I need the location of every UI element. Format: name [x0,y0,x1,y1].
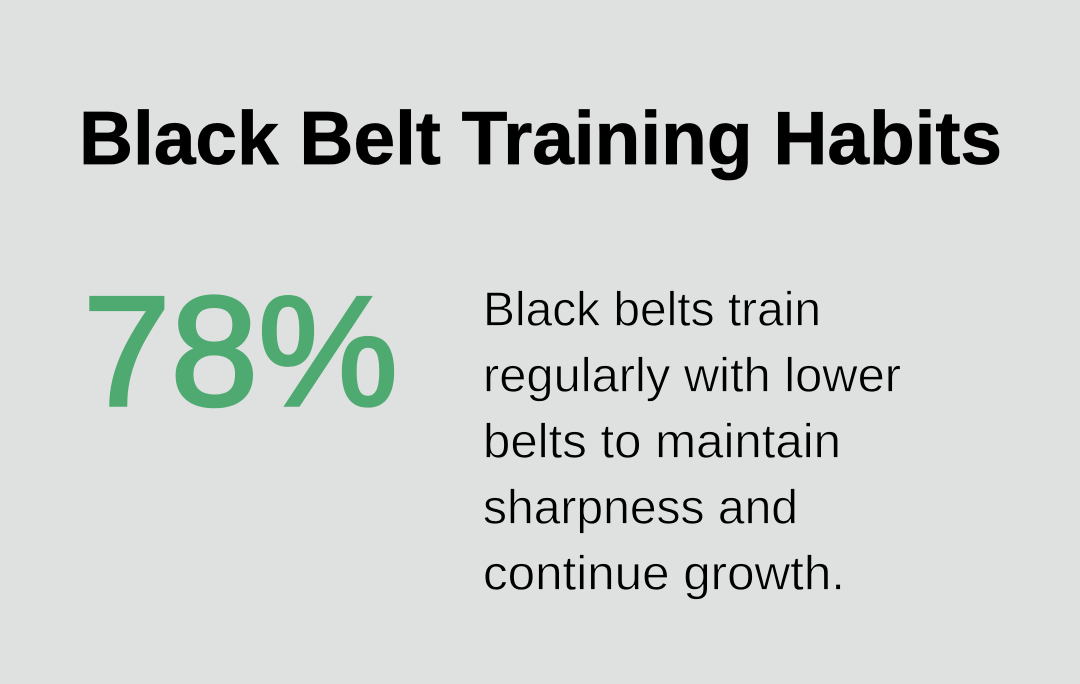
title: Black Belt Training Habits [79,96,1002,180]
line 4: sharpness and [483,482,798,534]
line 2: regularly with lower [483,350,901,402]
statistic: 78%: 78% [83,265,398,439]
line 5: continue growth. [483,548,845,600]
description text [483,284,901,600]
line 3: belts to maintain [483,416,841,468]
line 1: Black belts train [483,284,821,336]
